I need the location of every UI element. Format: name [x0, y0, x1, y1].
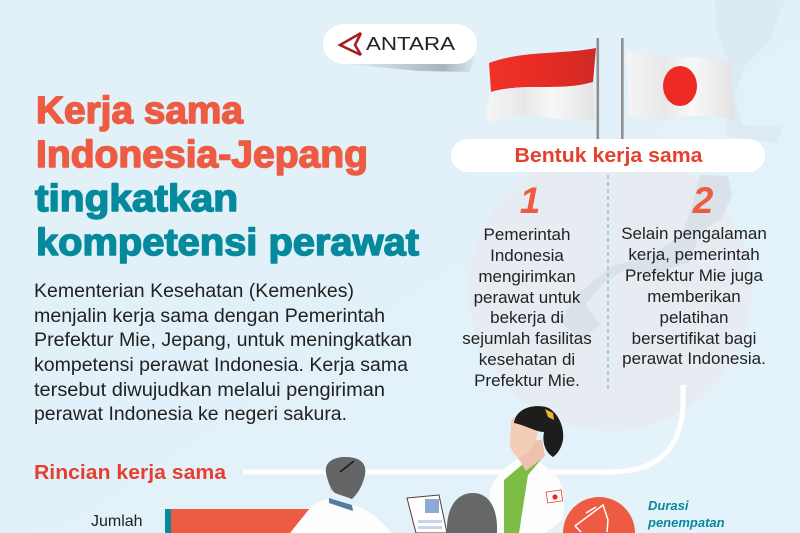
column divider	[607, 175, 609, 390]
title: Indonesia-Jepang	[36, 134, 368, 176]
intro text block: tersebut diwujudkan melalui pengiriman	[34, 380, 385, 401]
icon: Antara logo mark	[340, 33, 361, 55]
nurse head	[514, 440, 545, 471]
column 1	[462, 180, 592, 390]
column 1 text: mengirimkan	[478, 267, 576, 286]
column 1 text: bekerja di	[490, 308, 564, 327]
column 1 text: perawat untuk	[474, 288, 581, 307]
column 1 text	[462, 225, 592, 390]
flag poles	[596, 38, 624, 140]
white connector line	[243, 385, 683, 472]
flag: Indonesia	[487, 48, 596, 122]
column 2 text: bersertifikat bagi	[632, 329, 756, 348]
intro text block	[34, 281, 412, 425]
column 1 text: kesehatan di	[479, 350, 575, 369]
flag: Japan	[626, 48, 735, 121]
intro text block: Prefektur Mie, Jepang, untuk meningkatkan	[34, 330, 412, 351]
column 2 text: pelatihan	[659, 308, 729, 327]
column 2 text: perawat Indonesia.	[622, 349, 766, 368]
nurse coat	[490, 458, 564, 533]
illustration: nurse with clipboard	[407, 406, 564, 533]
logo wordmark: ANTARA	[366, 33, 456, 54]
column 1 text: sejumlah fasilitas	[462, 329, 592, 348]
title	[35, 90, 419, 264]
logo pill	[323, 24, 477, 72]
column 1 text: Pemerintah	[484, 225, 570, 244]
bar row: Jumlah: Jumlah	[91, 513, 143, 530]
number 1: 1	[520, 180, 540, 221]
background map: northern land silhouette	[715, 0, 785, 143]
intro text block: Kementerian Kesehatan (Kemenkes)	[34, 281, 354, 302]
column 2	[621, 180, 767, 368]
heading pill: Bentuk kerja sama: Bentuk kerja sama	[514, 145, 703, 167]
nurse hair	[514, 406, 563, 457]
column 2 text: kerja, pemerintah	[628, 245, 760, 264]
intro text block: kompetensi perawat Indonesia. Kerja sama	[34, 355, 408, 376]
intro text block: menjalin kerja sama dengan Pemerintah	[34, 306, 385, 327]
column 2 text	[621, 224, 767, 368]
label: Durasi penempatan: penempatan	[647, 515, 725, 530]
title: kompetensi perawat	[36, 222, 419, 264]
illustration: second doctor head	[447, 493, 497, 533]
bar row: Jumlah	[91, 509, 311, 533]
flags	[487, 38, 735, 140]
globe with map of Japan	[469, 149, 751, 431]
clipboard	[407, 495, 447, 533]
title: tingkatkan	[35, 178, 238, 220]
column 2 text: memberikan	[647, 287, 741, 306]
label: Durasi penempatan	[647, 498, 725, 530]
intro text block: perawat Indonesia ke negeri sakura.	[34, 404, 347, 425]
badge: Japan flag	[546, 490, 563, 503]
heading: Rincian kerja sama: Rincian kerja sama	[34, 462, 227, 484]
title: Kerja sama	[36, 90, 244, 132]
column 2 text: Prefektur Mie juga	[625, 266, 764, 285]
illustration: male doctor	[290, 457, 392, 533]
column 2 text: Selain pengalaman	[621, 224, 767, 243]
icon: clipboard and coin	[563, 497, 635, 533]
heading pill: Bentuk kerja sama	[451, 139, 765, 172]
number 2: 2	[692, 180, 714, 221]
column 1 text: Indonesia	[490, 246, 564, 265]
label: Durasi penempatan: Durasi	[648, 498, 689, 513]
column 1 text: Prefektur Mie.	[474, 371, 580, 390]
